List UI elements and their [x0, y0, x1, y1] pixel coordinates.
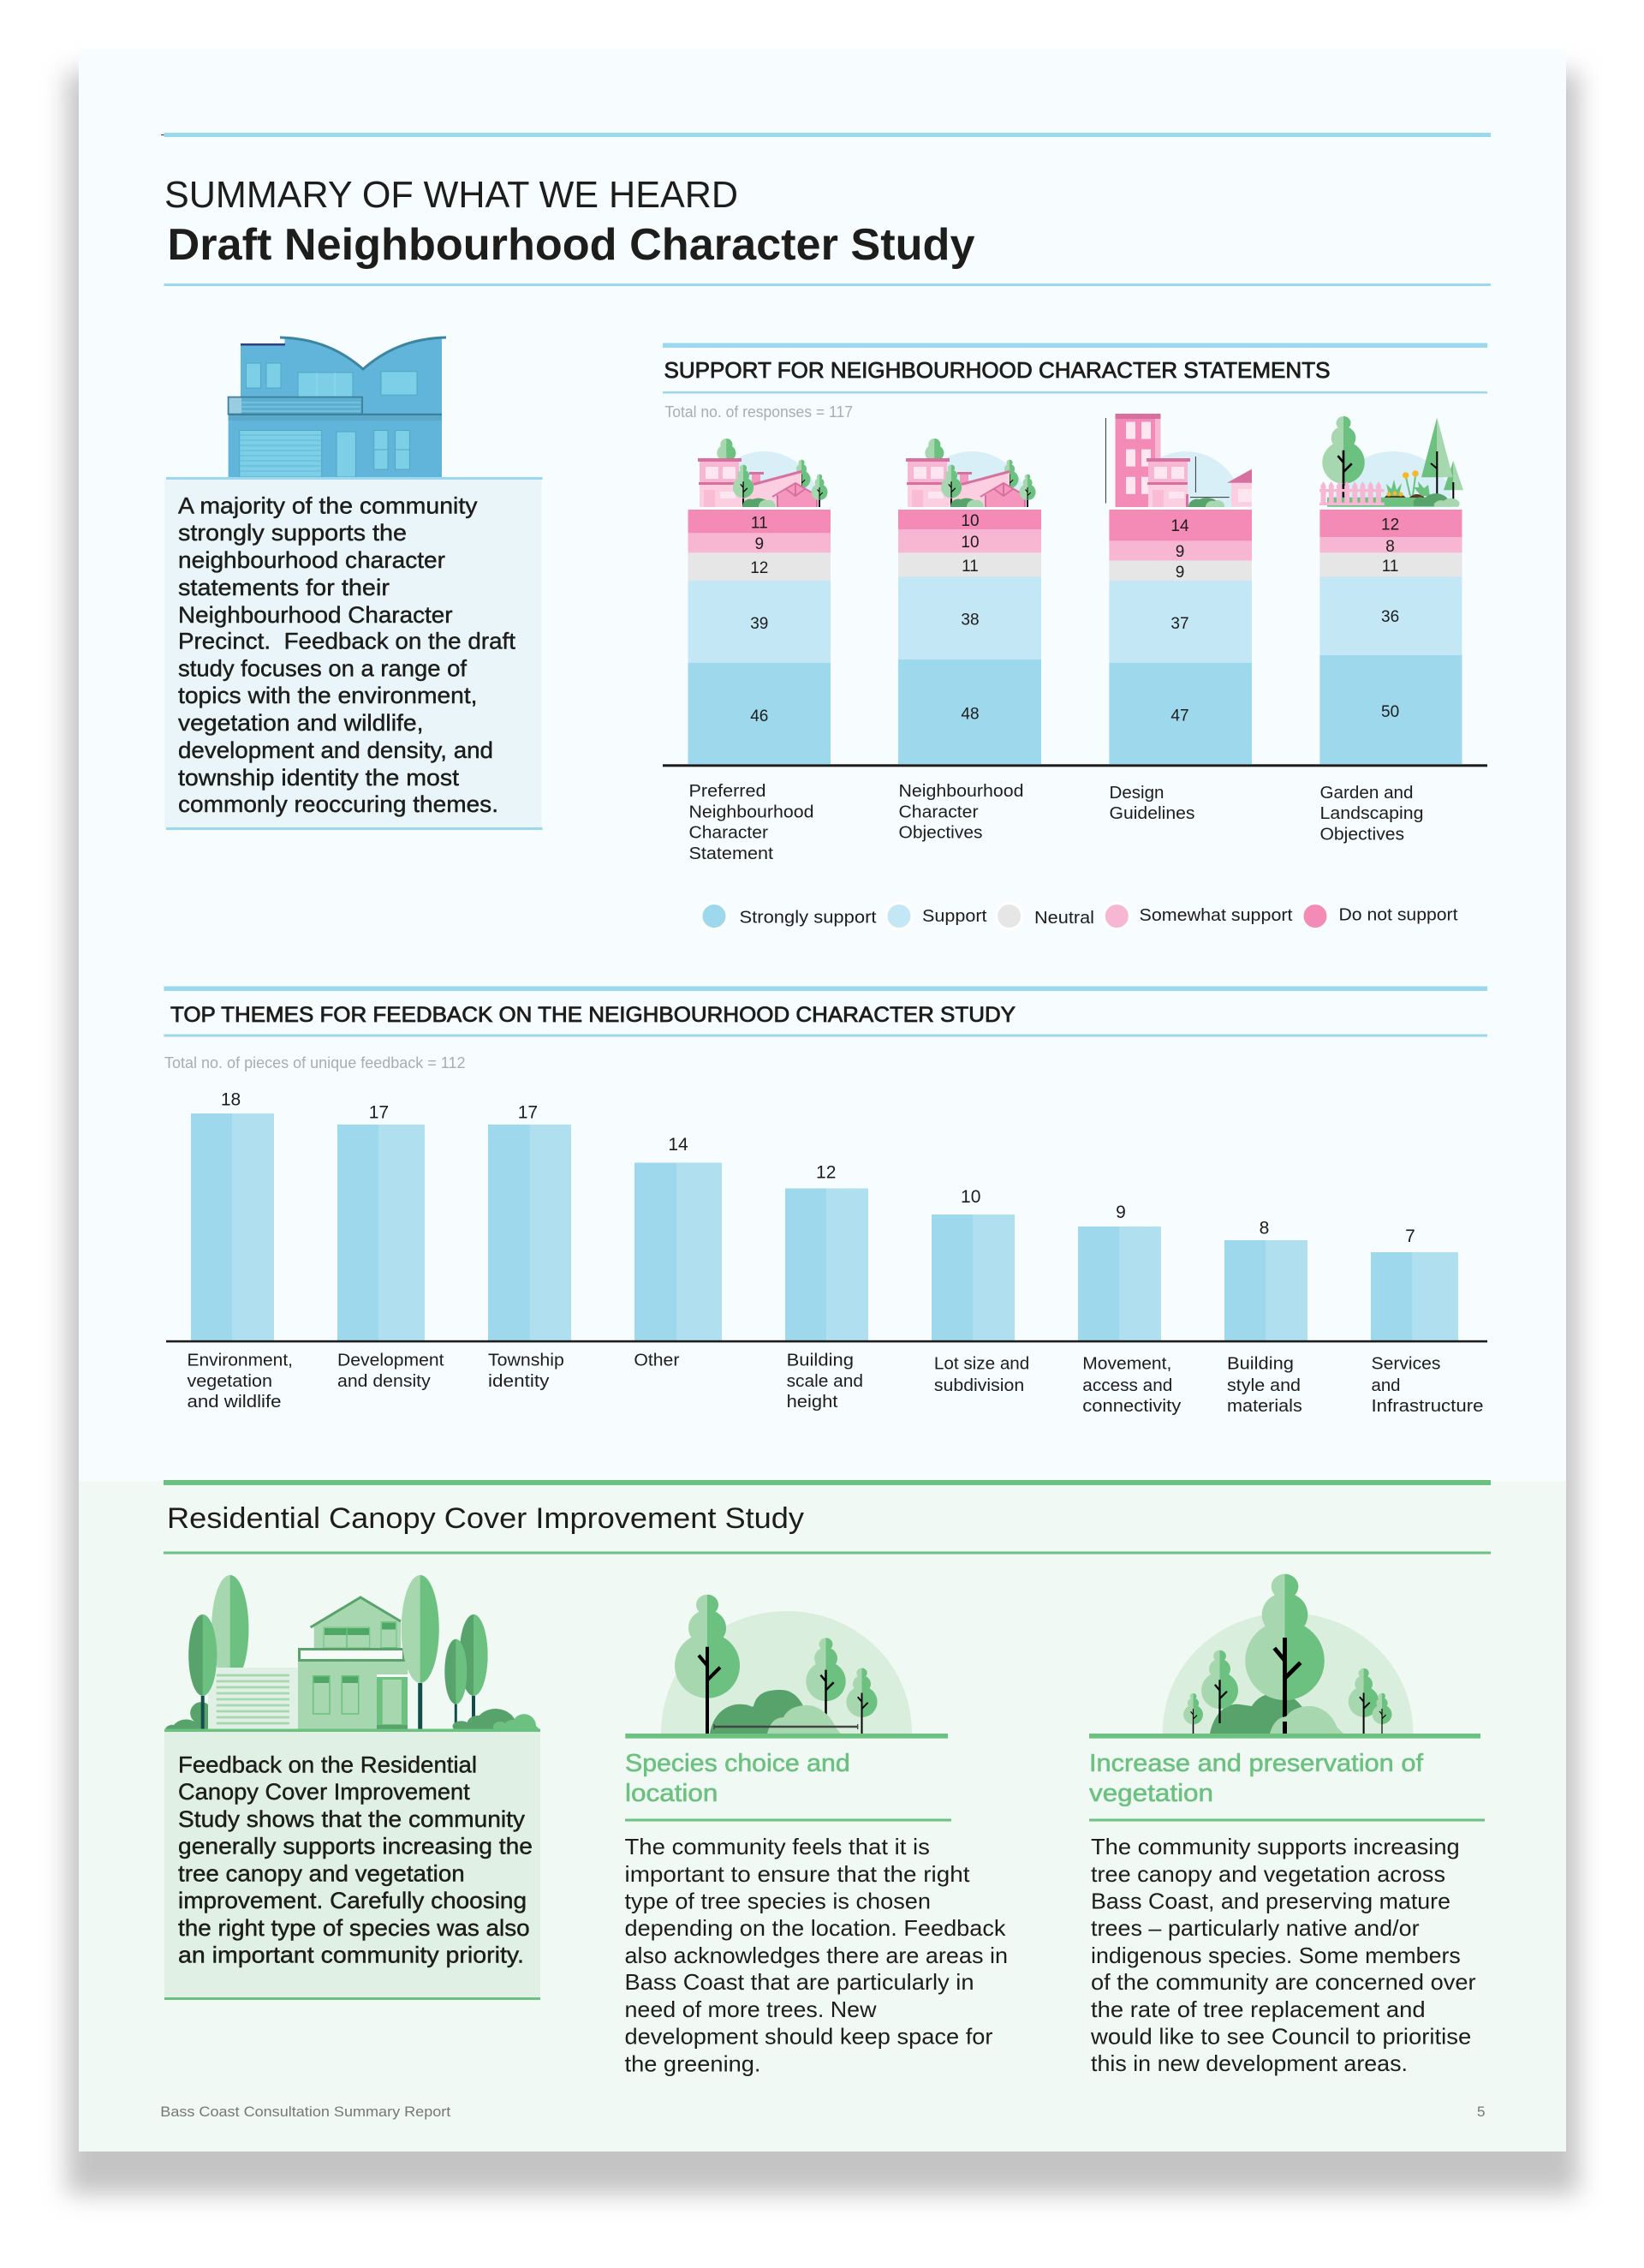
- title line 1: SUMMARY OF WHAT WE HEARD: [164, 174, 738, 216]
- axis labels: top themes: Development: [337, 1351, 444, 1370]
- callout: community support summary: Neighbourhood Character: [178, 602, 453, 628]
- text block: species choice body: need of more trees. New: [625, 1996, 877, 2022]
- bar: Movement, access and connectivity: [1078, 1203, 1161, 1340]
- stacked bar: Preferred Neighbourhood Character Statement: 12: [750, 559, 768, 577]
- axis label: Neighbourhood Character Objectives: Character: [899, 803, 979, 821]
- stacked bar: Neighbourhood Character Objectives: 48: [961, 706, 980, 723]
- heading: increase and preservation: Increase and preservation of: [1089, 1750, 1424, 1777]
- axis labels: top themes: Infrastructure: [1372, 1397, 1483, 1416]
- stacked bar: Preferred Neighbourhood Character Statement: 11: [751, 514, 768, 533]
- note: total responses: Total no. of responses = 117: [664, 403, 853, 421]
- stacked bar: Neighbourhood Character Objectives: 10: [961, 534, 980, 552]
- callout: canopy cover summary: [164, 1728, 540, 2000]
- axis labels: top themes: Other: [634, 1351, 680, 1370]
- text block: increase and preservation body: trees – particularly native and/or: [1091, 1915, 1420, 1941]
- axis labels: top themes: and: [1372, 1376, 1401, 1395]
- text block: species choice body: Bass Coast that are particularly in: [625, 1969, 974, 1995]
- bar: Other: 14: [668, 1135, 688, 1155]
- callout: community support summary: Precinct. Feedback on the draft: [178, 629, 516, 654]
- callout: canopy cover summary: Canopy Cover Improvement: [178, 1779, 470, 1805]
- bar: Development and density: 17: [369, 1103, 389, 1123]
- stacked bar: Preferred Neighbourhood Character Statement: 46: [750, 707, 768, 725]
- axis label: Garden and Landscaping Objectives: Objectives: [1320, 826, 1404, 845]
- axis label: Neighbourhood Character Objectives: Objectives: [899, 824, 983, 843]
- text block: increase and preservation body: Bass Coast, and preserving mature: [1091, 1888, 1450, 1913]
- stacked bar: Design Guidelines: [1109, 510, 1252, 764]
- heading: species choice: Species choice and: [625, 1750, 850, 1777]
- axis label: Neighbourhood Character Objectives: Neighbourhood: [899, 782, 1024, 801]
- stacked bar: Garden and Landscaping Objectives: 8: [1385, 538, 1395, 556]
- bar: Lot size and subdivision: 10: [961, 1187, 980, 1207]
- stacked bar: Garden and Landscaping Objectives: [1319, 510, 1462, 764]
- text block: species choice body: important to ensure that the right: [625, 1861, 970, 1887]
- heading: species choice: location: [625, 1780, 718, 1807]
- text block: increase and preservation body: [1090, 1834, 1476, 2076]
- axis labels: top themes: materials: [1227, 1397, 1302, 1416]
- axis labels: top themes: [187, 1351, 1483, 1416]
- bar: Development and density: [337, 1103, 425, 1340]
- bar: Township identity: 17: [518, 1103, 538, 1123]
- footer: 5: [1477, 2104, 1485, 2120]
- axis label: Garden and Landscaping Objectives: Garden and: [1320, 784, 1413, 803]
- icon: pink apartment tower and setbacks: [1105, 414, 1252, 507]
- axis labels: top themes: identity: [488, 1372, 549, 1391]
- heading: species choice: [625, 1750, 951, 1821]
- callout: canopy cover summary: an important community priority.: [178, 1943, 524, 1968]
- callout: canopy cover summary: the right type of species was also: [178, 1915, 530, 1941]
- bar: Township identity: [488, 1103, 571, 1340]
- text block: increase and preservation body: indigenous species. Some members: [1091, 1943, 1461, 1968]
- axis label: Garden and Landscaping Objectives: [1320, 784, 1423, 845]
- axis labels: top themes: Building: [787, 1351, 854, 1370]
- stacked bar: Neighbourhood Character Objectives: 10: [961, 512, 980, 530]
- text block: increase and preservation body: would like to see Council to prioritise: [1090, 2024, 1471, 2050]
- callout: community support summary: study focuses on a range of: [178, 656, 468, 682]
- axis label: Neighbourhood Character Objectives: [899, 782, 1024, 843]
- stacked bar: Design Guidelines: 47: [1170, 707, 1189, 725]
- legend: Somewhat support: [1139, 906, 1293, 925]
- text block: species choice body: depending on the location. Feedback: [625, 1915, 1007, 1941]
- axis labels: top themes: Township: [488, 1351, 564, 1370]
- text block: species choice body: the greening.: [625, 2050, 760, 2076]
- stacked bar: Design Guidelines: 9: [1176, 543, 1184, 561]
- footer: [160, 2104, 1485, 2120]
- stacked bar: Neighbourhood Character Objectives: 11: [962, 558, 979, 576]
- axis labels: top themes: scale and: [787, 1372, 863, 1391]
- callout: canopy cover summary: Feedback on the Residential: [178, 1752, 477, 1778]
- legend: Support: [922, 907, 987, 926]
- axis labels: top themes: Building: [1227, 1355, 1294, 1374]
- heading: increase and preservation: vegetation: [1089, 1780, 1213, 1807]
- stacked bar: Design Guidelines: 9: [1176, 564, 1184, 582]
- bar: Building style and materials: 8: [1260, 1218, 1269, 1238]
- footer: Bass Coast Consultation Summary Report: [160, 2104, 451, 2120]
- bar chart: top themes: [166, 1090, 1487, 1342]
- stacked bar: Garden and Landscaping Objectives: 50: [1381, 703, 1399, 721]
- heading: Residential Canopy Cover Improvement Study: Residential Canopy Cover Improvement Study: [167, 1502, 804, 1535]
- stacked bar: Garden and Landscaping Objectives: 36: [1381, 608, 1399, 626]
- title line 2: Draft Neighbourhood Character Study: [168, 220, 975, 270]
- axis label: Design Guidelines: Guidelines: [1110, 804, 1195, 823]
- callout: community support summary: strongly supports the: [178, 520, 407, 546]
- heading: support chart: SUPPORT FOR NEIGHBOURHOOD CHARACTER STATEMENTS: [664, 357, 1331, 383]
- callout: canopy cover summary: improvement. Carefully choosing: [178, 1888, 527, 1913]
- axis labels: top themes: Services: [1372, 1355, 1440, 1374]
- stacked bar: Garden and Landscaping Objectives: 11: [1382, 558, 1398, 576]
- heading: support chart: [663, 343, 1487, 394]
- heading: top themes chart: TOP THEMES FOR FEEDBACK ON THE NEIGHBOURHOOD CHARACTER STUDY: [170, 1003, 1016, 1027]
- axis labels: top themes: connectivity: [1082, 1397, 1181, 1416]
- header: [161, 133, 1491, 286]
- callout: community support summary: development and density, and: [178, 737, 493, 763]
- bar: Building style and materials: [1224, 1218, 1307, 1340]
- text block: species choice body: type of tree species is chosen: [625, 1888, 931, 1913]
- column: Species choice and location: [625, 1750, 1008, 2076]
- heading: top themes chart: [164, 987, 1487, 1036]
- axis labels: top themes: and wildlife: [187, 1393, 281, 1412]
- stacked bar: Preferred Neighbourhood Character Statement: 9: [755, 535, 764, 553]
- stacked bar: Design Guidelines: 14: [1170, 517, 1189, 535]
- stacked bar: Neighbourhood Character Objectives: [898, 510, 1041, 764]
- callout: community support summary: A majority of the community: [178, 493, 478, 519]
- bar: Environment, vegetation and wildlife: [191, 1090, 274, 1340]
- axis labels: top themes: Movement,: [1082, 1355, 1171, 1374]
- icon: garden with trees and fence: [1319, 416, 1463, 507]
- bar: Environment, vegetation and wildlife: 18: [221, 1090, 241, 1110]
- bar: Building scale and height: [785, 1163, 868, 1340]
- bar: Other: [634, 1135, 722, 1340]
- legend: [701, 904, 1458, 929]
- callout: community support summary: commonly reoccuring themes.: [178, 791, 498, 817]
- axis label: Preferred Neighbourhood Character Statement: Preferred: [688, 782, 765, 801]
- stacked bar: Neighbourhood Character Objectives: 38: [961, 612, 980, 629]
- callout: canopy cover summary: Study shows that the community: [178, 1806, 526, 1832]
- callout: canopy cover summary: tree canopy and vegetation: [178, 1861, 465, 1887]
- axis labels: top themes: Environment,: [187, 1351, 293, 1370]
- axis labels: top themes: and density: [337, 1372, 431, 1391]
- axis labels: top themes: access and: [1082, 1376, 1172, 1395]
- text block: species choice body: The community feels that it is: [625, 1834, 930, 1859]
- legend: Strongly support: [740, 908, 877, 927]
- axis labels: top themes: subdivision: [934, 1376, 1024, 1395]
- green section background: [79, 1482, 1566, 2152]
- axis labels: top themes: Lot size and: [934, 1355, 1029, 1374]
- legend: Neutral: [1034, 909, 1094, 928]
- callout: community support summary: township identity the most: [178, 765, 460, 791]
- stacked bar: Preferred Neighbourhood Character Statement: 39: [750, 615, 768, 633]
- icon: blue modern house: [229, 337, 446, 477]
- text block: increase and preservation body: this in new development areas.: [1091, 2050, 1408, 2076]
- heading: increase and preservation: [1089, 1750, 1485, 1821]
- column: Increase and preservation of vegetation: [1089, 1750, 1485, 2076]
- text block: increase and preservation body: of the community are concerned over: [1091, 1969, 1476, 1995]
- callout: community support summary: topics with the environment,: [178, 683, 478, 708]
- note: total feedback: Total no. of pieces of unique feedback = 112: [164, 1054, 466, 1071]
- bar: Lot size and subdivision: [932, 1187, 1015, 1340]
- stacked bar: Garden and Landscaping Objectives: 12: [1381, 516, 1399, 534]
- bar: Services and Infrastructure: [1371, 1227, 1458, 1340]
- stacked bar: Design Guidelines: 37: [1170, 615, 1189, 633]
- legend: Do not support: [1339, 906, 1458, 925]
- axis label: Garden and Landscaping Objectives: Landscaping: [1320, 804, 1423, 823]
- text block: increase and preservation body: The community supports increasing: [1091, 1834, 1460, 1859]
- stacked bar: Preferred Neighbourhood Character Statement: [688, 510, 831, 764]
- callout: community support summary: neighbourhood character: [178, 547, 445, 573]
- text block: increase and preservation body: the rate of tree replacement and: [1091, 1996, 1426, 2022]
- axis labels: top themes: vegetation: [187, 1372, 272, 1391]
- axis label: Preferred Neighbourhood Character Statement: Neighbourhood: [688, 803, 813, 821]
- icon: pink houses with trees 2: [906, 439, 1036, 507]
- bar: Building scale and height: 12: [816, 1163, 836, 1183]
- callout: canopy cover summary: generally supports increasing the: [178, 1834, 533, 1859]
- axis labels: top themes: height: [787, 1393, 838, 1412]
- callout: community support summary: vegetation and wildlife,: [178, 710, 423, 736]
- axis label: Preferred Neighbourhood Character Statement: [688, 782, 813, 863]
- axis label: Preferred Neighbourhood Character Statement: Statement: [688, 845, 773, 863]
- axis label: Design Guidelines: [1110, 784, 1195, 823]
- icon: pink houses with trees 1: [698, 439, 827, 507]
- icon: green house with trees: [165, 1575, 540, 1730]
- axis label: Design Guidelines: Design: [1110, 784, 1164, 803]
- text block: species choice body: also acknowledges there are areas in: [625, 1943, 1008, 1968]
- heading: Residential Canopy Cover Improvement Study: [164, 1480, 1491, 1554]
- text block: increase and preservation body: tree canopy and vegetation across: [1091, 1861, 1445, 1887]
- axis labels: top themes: style and: [1227, 1376, 1301, 1395]
- icon: trees and species spacing: [625, 1595, 948, 1739]
- axis label: Preferred Neighbourhood Character Statement: Character: [688, 824, 768, 843]
- text block: species choice body: [625, 1834, 1008, 2076]
- text block: species choice body: development should keep space for: [625, 2024, 993, 2050]
- bar: Services and Infrastructure: 7: [1405, 1227, 1415, 1246]
- callout: community support summary: statements for their: [178, 575, 390, 600]
- bar: Movement, access and connectivity: 9: [1116, 1203, 1126, 1222]
- callout: community support summary: [164, 477, 543, 830]
- icon: increasing tree canopy: [1089, 1574, 1480, 1739]
